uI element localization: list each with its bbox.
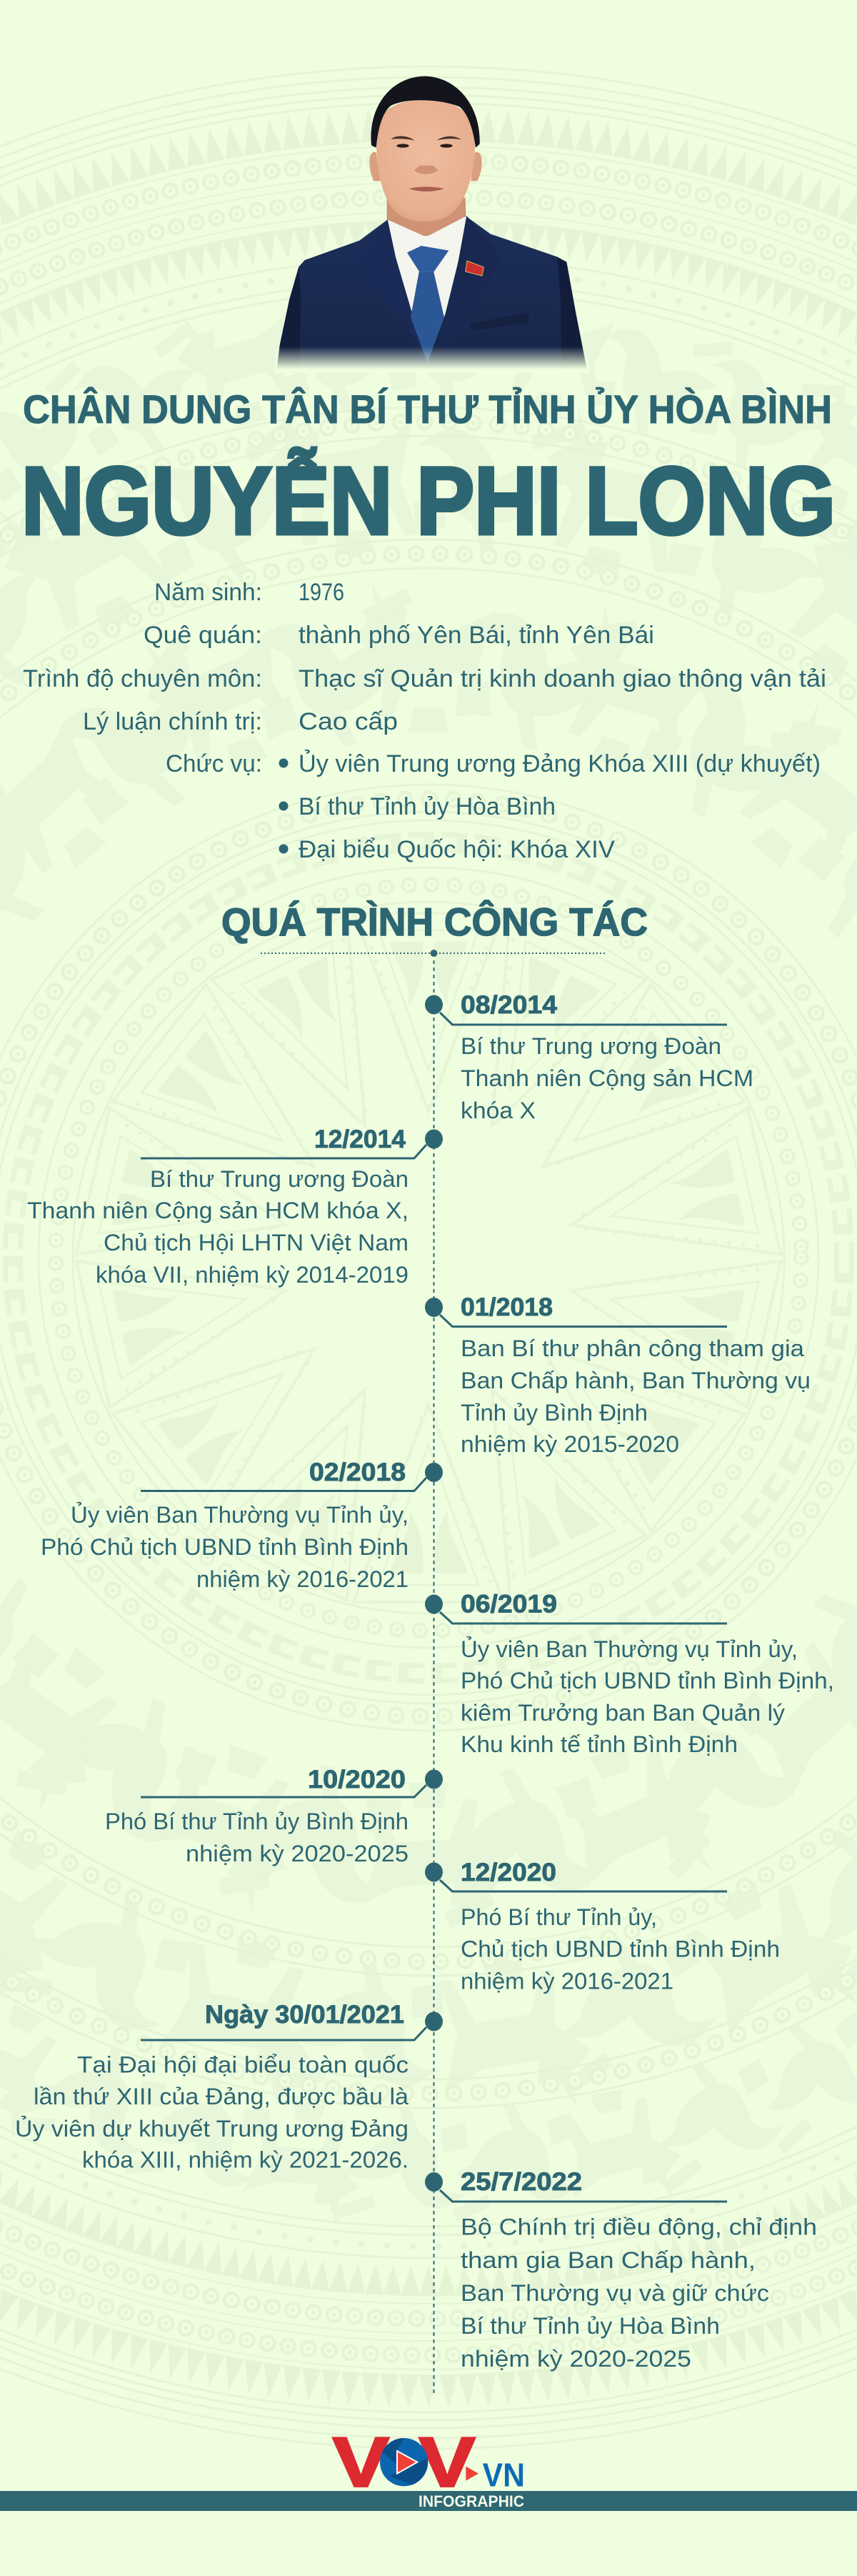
timeline entry: 08/2014: Bí thư Trung ương Đoàn (461, 1033, 721, 1059)
info values: Đại biểu Quốc hội: Khóa XIV (299, 836, 615, 863)
timeline entry: 12/2020: Chủ tịch UBND tỉnh Bình Định (461, 1936, 780, 1962)
timeline entry: 12/2014: khóa VII, nhiệm kỳ 2014-2019 (96, 1262, 409, 1288)
timeline entry: 12/2020: Phó Bí thư Tỉnh ủy, (461, 1904, 657, 1930)
info labels: Quê quán: (144, 622, 262, 649)
logo: VOV.VN: V (333, 2422, 389, 2501)
timeline entry: 12/2014: Bí thư Trung ương Đoàn (150, 1166, 409, 1192)
personal information panel (23, 579, 826, 863)
timeline entry: 10/2020 (105, 1766, 443, 1866)
timeline entry: 12/2020 (425, 1859, 780, 1994)
info values: Ủy viên Trung ương Đảng Khóa XIII (dự khuyết) (299, 750, 821, 777)
timeline entry: 06/2019: Ủy viên Ban Thường vụ Tỉnh ủy, (461, 1636, 798, 1662)
info values: Thạc sĩ Quản trị kinh doanh giao thông vận tải (299, 665, 826, 692)
logo: VOV.VN: V (419, 2422, 476, 2501)
timeline entry: 10/2020: Phó Bí thư Tỉnh ủy Bình Định (105, 1809, 409, 1834)
timeline entry: 12/2020: 12/2020 (461, 1859, 556, 1886)
timeline entry: 08/2014: khóa X (461, 1098, 536, 1123)
timeline entry: Ngày 30/01/2021: lần thứ XIII của Đảng, được bầu là (34, 2084, 409, 2109)
timeline entry: Ngày 30/01/2021: khóa XIII, nhiệm kỳ 2021-2026. (82, 2147, 409, 2172)
timeline axis (261, 950, 605, 2396)
timeline entry: 02/2018: nhiệm kỳ 2016-2021 (196, 1566, 409, 1592)
info labels: Lý luận chính trị: (83, 708, 262, 735)
timeline entry: 25/7/2022: Ban Thường vụ và giữ chức (461, 2280, 769, 2306)
timeline entry: 08/2014 (425, 991, 753, 1123)
timeline entry: 10/2020: 10/2020 (308, 1766, 406, 1794)
info labels: Chức vụ: (166, 750, 262, 777)
timeline entry: Ngày 30/01/2021: Ngày 30/01/2021 (205, 2001, 404, 2029)
info labels: Trình độ chuyên môn: (23, 665, 262, 692)
timeline entry: 02/2018: 02/2018 (309, 1458, 406, 1486)
timeline entry: 25/7/2022: Bộ Chính trị điều động, chỉ định (461, 2214, 817, 2239)
info values: Bí thư Tỉnh ủy Hòa Bình (299, 793, 556, 820)
timeline entry: 01/2018: Tỉnh ủy Bình Định (461, 1400, 648, 1426)
timeline entry: 06/2019: kiêm Trưởng ban Ban Quản lý (461, 1700, 785, 1726)
timeline entry: 25/7/2022: Bí thư Tỉnh ủy Hòa Bình (461, 2313, 720, 2339)
timeline entry: 08/2014: Thanh niên Cộng sản HCM (461, 1065, 753, 1091)
timeline entry: Ngày 30/01/2021: Tại Đại hội đại biểu toàn quốc (77, 2052, 409, 2078)
timeline entry: 06/2019 (425, 1591, 834, 1757)
portrait photo (275, 76, 589, 373)
timeline entry: Ngày 30/01/2021 (15, 2001, 443, 2172)
timeline entry: 25/7/2022: 25/7/2022 (461, 2168, 582, 2196)
info labels: Năm sinh: (154, 579, 262, 606)
timeline entry: 06/2019: Khu kinh tế tỉnh Bình Định (461, 1731, 738, 1757)
logo: VOV.VN (333, 2422, 525, 2501)
timeline entry: 25/7/2022 (425, 2168, 817, 2372)
logo: VOV.VN: VN (483, 2456, 525, 2493)
info values (299, 579, 826, 863)
info values: thành phố Yên Bái, tỉnh Yên Bái (299, 622, 654, 649)
footer: infographic band (0, 2491, 857, 2511)
timeline entry: 02/2018: Ủy viên Ban Thường vụ Tỉnh ủy, (71, 1502, 409, 1528)
timeline entry: 01/2018: Ban Chấp hành, Ban Thường vụ (461, 1368, 811, 1393)
timeline entry: 02/2018: Phó Chủ tịch UBND tỉnh Bình Định (41, 1534, 409, 1560)
timeline entry: 06/2019: 06/2019 (461, 1591, 557, 1618)
timeline entry: 08/2014: 08/2014 (461, 991, 558, 1019)
timeline entry: 12/2014: Thanh niên Cộng sản HCM khóa X, (27, 1198, 409, 1223)
timeline entry: 25/7/2022: nhiệm kỳ 2020-2025 (461, 2346, 691, 2372)
timeline entry: 01/2018: nhiệm kỳ 2015-2020 (461, 1431, 679, 1457)
timeline entry: 10/2020: nhiệm kỳ 2020-2025 (186, 1841, 409, 1866)
timeline entry: 01/2018: 01/2018 (461, 1293, 553, 1321)
timeline entry: 25/7/2022: tham gia Ban Chấp hành, (461, 2247, 756, 2273)
timeline entry: 12/2014: 12/2014 (314, 1125, 406, 1153)
timeline entry: 01/2018 (425, 1293, 811, 1457)
timeline entry: 12/2014: Chủ tịch Hội LHTN Việt Nam (104, 1230, 409, 1255)
position bullets (279, 759, 289, 853)
timeline entry: 01/2018: Ban Bí thư phân công tham gia (461, 1336, 804, 1361)
timeline entry: 06/2019: Phó Chủ tịch UBND tỉnh Bình Định, (461, 1668, 834, 1694)
timeline entry: 12/2014 (27, 1125, 443, 1288)
timeline entry: Ngày 30/01/2021: Ủy viên dự khuyết Trung ương Đảng (15, 2116, 409, 2142)
timeline entry: 02/2018 (41, 1458, 443, 1592)
footer: infographic band: INFOGRAPHIC (419, 2492, 524, 2510)
timeline entry: 12/2020: nhiệm kỳ 2016-2021 (461, 1968, 673, 1994)
info labels (23, 579, 262, 777)
info values: Cao cấp (299, 708, 398, 735)
section heading: work history: QUÁ TRÌNH CÔNG TÁC (221, 900, 648, 944)
info values: 1976 (299, 579, 344, 606)
